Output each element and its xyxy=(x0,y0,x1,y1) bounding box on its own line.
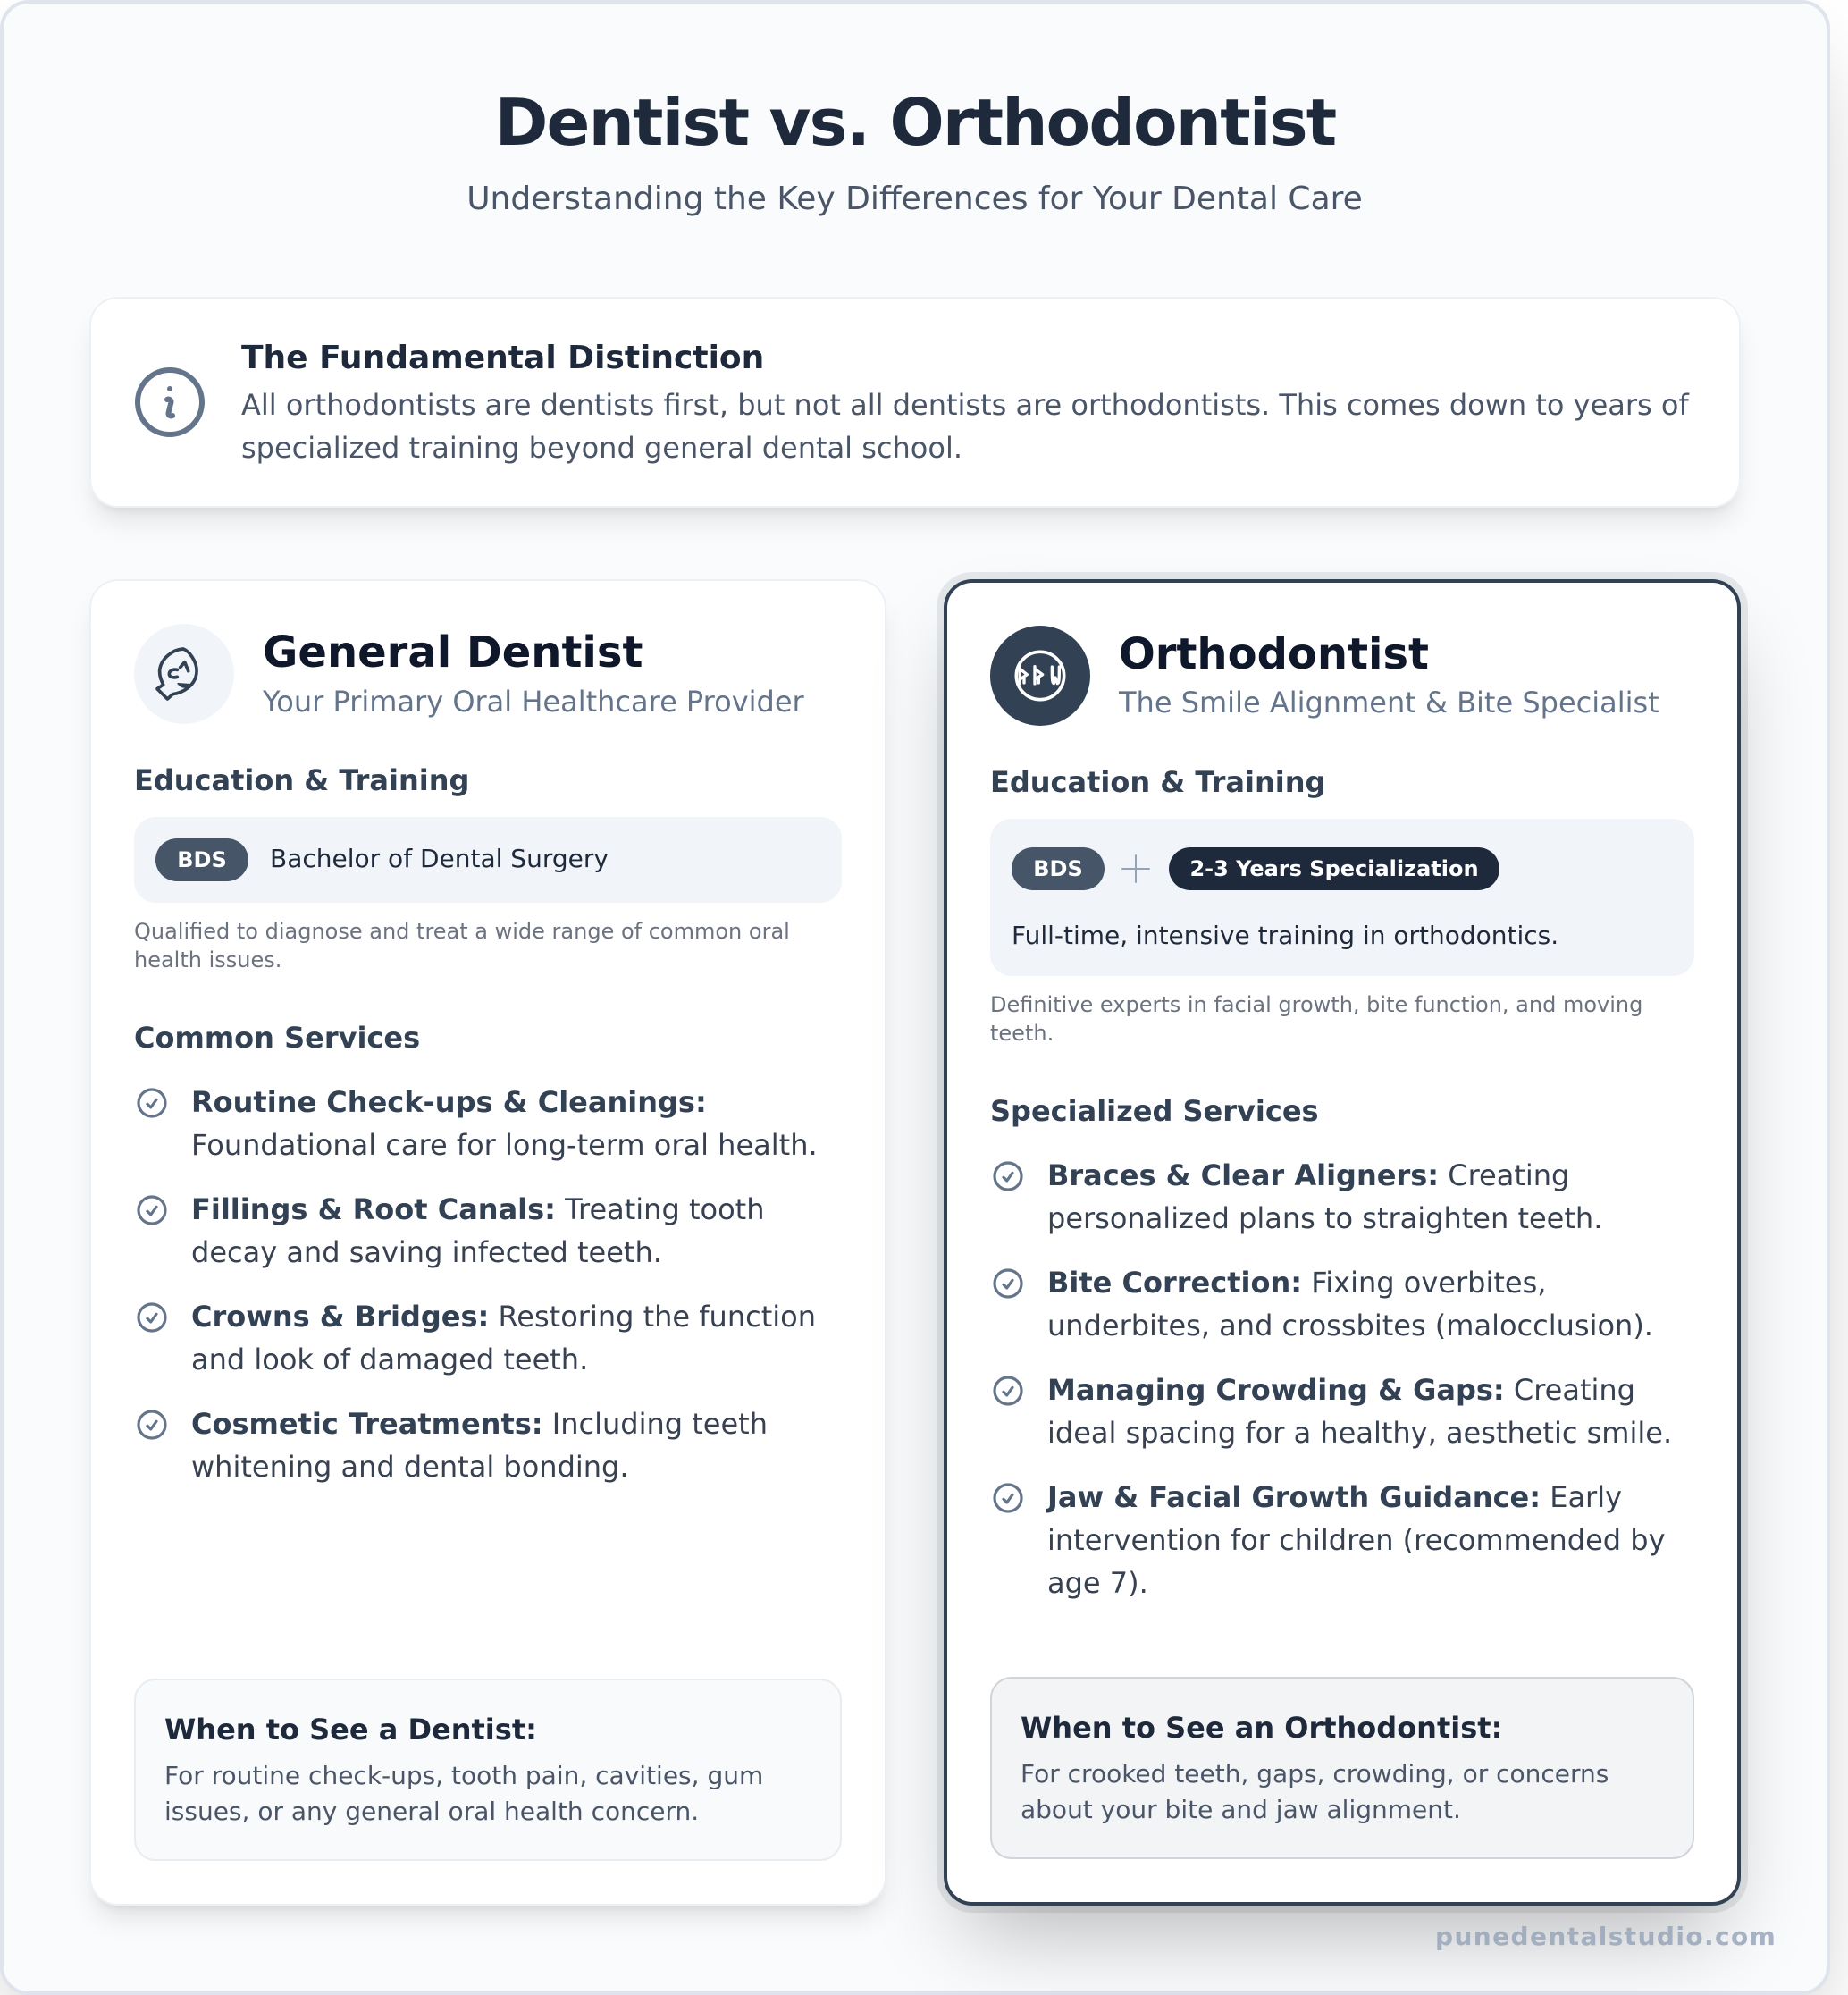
text: degree name: Bachelor of Dental Surgery xyxy=(270,844,609,873)
icon: info circle xyxy=(135,367,205,437)
heading: education and training: Education & Training xyxy=(990,765,1325,799)
service item: crowns xyxy=(137,1300,816,1376)
badge: BDS: BDS xyxy=(1033,856,1083,881)
text: callout xyxy=(1021,1759,1609,1824)
service item: bite correction: underbites, and crossbites (malocclusion). xyxy=(1047,1309,1653,1343)
text: distinction description: specialized training beyond general dental school. xyxy=(241,431,962,465)
icon: dark circle xyxy=(990,626,1090,726)
text: callout: about your bite and jaw alignment. xyxy=(1021,1795,1461,1824)
service item: jaw growth xyxy=(993,1480,1666,1600)
service item: jaw growth: intervention for children (recommended by xyxy=(1047,1523,1666,1557)
service item: braces: personalized plans to straighten teeth. xyxy=(1047,1201,1602,1235)
text: expertise note xyxy=(990,992,1642,1046)
icon: tooth glyph xyxy=(155,647,198,701)
service item: cosmetic: Cosmetic Treatments: Including teeth xyxy=(191,1407,768,1441)
service item: crowding xyxy=(993,1373,1672,1450)
panel: fundamental distinction xyxy=(89,297,1741,508)
text: training description: Full-time, intensive training in orthodontics. xyxy=(1012,921,1558,950)
heading: education and training: Education & Training xyxy=(134,763,469,797)
heading: specialized services: Specialized Services xyxy=(990,1094,1319,1128)
education box xyxy=(990,819,1694,976)
service item: check-ups: Foundational care for long-term oral health. xyxy=(191,1128,818,1162)
text: qualification note: Qualified to diagnose and treat a wide range of common oral xyxy=(134,919,790,944)
text: distinction description xyxy=(241,388,1689,465)
service item: fillings xyxy=(137,1192,764,1269)
text: qualification note xyxy=(134,919,790,972)
badge: BDS xyxy=(1012,847,1105,890)
icon: plus xyxy=(1121,854,1150,883)
text: qualification note: health issues. xyxy=(134,947,281,972)
panel: orthodontist xyxy=(944,579,1741,1906)
badge: BDS xyxy=(155,838,248,881)
text: callout: issues, or any general oral health concern. xyxy=(164,1797,699,1826)
service item: bite correction xyxy=(993,1266,1653,1343)
text: distinction description: All orthodontists are dentists first, but not all dentists are orthodontists. This comes down to years of xyxy=(241,388,1689,422)
service item: jaw growth: age 7). xyxy=(1047,1566,1148,1600)
service item: crowns: and look of damaged teeth. xyxy=(191,1343,588,1376)
heading: orthodontist: Orthodontist xyxy=(1119,629,1429,679)
badge: BDS: BDS xyxy=(177,847,227,872)
icon: aligned teeth in ring xyxy=(1015,651,1065,701)
text: callout xyxy=(164,1761,763,1826)
heading: callout: When to See a Dentist: xyxy=(164,1713,537,1747)
text: expertise note: Definitive experts in facial growth, bite function, and moving xyxy=(990,992,1642,1017)
service item: braces: Braces & Clear Aligners: Creating xyxy=(1047,1158,1569,1192)
education box xyxy=(134,817,842,903)
icon: tooth in light circle xyxy=(134,624,234,724)
text: role: The Smile Alignment & Bite Specialist xyxy=(1119,686,1659,720)
service item: braces xyxy=(993,1158,1602,1235)
service item: cosmetic xyxy=(137,1407,768,1484)
service item: check-ups: Routine Check-ups & Cleanings: xyxy=(191,1085,707,1119)
text: callout: For crooked teeth, gaps, crowding, or concerns xyxy=(1021,1759,1609,1789)
callout: when to see a dentist xyxy=(134,1679,842,1861)
service item: cosmetic: whitening and dental bonding. xyxy=(191,1450,629,1484)
service item: fillings: decay and saving infected teeth. xyxy=(191,1235,662,1269)
badge: specialization: 2-3 Years Specialization xyxy=(1189,856,1479,881)
service item: jaw growth: Jaw & Facial Growth Guidance: Early xyxy=(1047,1480,1622,1514)
watermark: punedentalstudio.com xyxy=(1435,1922,1777,1951)
heading: common services: Common Services xyxy=(134,1021,420,1055)
panel: general dentist xyxy=(89,579,886,1906)
badge: specialization xyxy=(1169,847,1499,890)
service item: check-ups xyxy=(137,1085,818,1162)
text: callout: For routine check-ups, tooth pain, cavities, gum xyxy=(164,1761,763,1790)
heading: general dentist: General Dentist xyxy=(263,627,643,678)
subtitle: Understanding the Key Differences for Your Dental Care xyxy=(466,181,1363,217)
title: Dentist vs. Orthodontist xyxy=(495,85,1335,160)
service item: crowns: Crowns & Bridges: Restoring the function xyxy=(191,1300,816,1334)
heading: the fundamental distinction: The Fundamental Distinction xyxy=(241,340,764,376)
heading: callout: When to See an Orthodontist: xyxy=(1021,1711,1502,1745)
text: role: Your Primary Oral Healthcare Provider xyxy=(263,685,804,719)
service item: crowding: ideal spacing for a healthy, aesthetic smile. xyxy=(1047,1416,1672,1450)
text: expertise note: teeth. xyxy=(990,1021,1054,1046)
callout: when to see an orthodontist xyxy=(990,1677,1694,1859)
service item: bite correction: Bite Correction: Fixing overbites, xyxy=(1047,1266,1546,1300)
service item: fillings: Fillings & Root Canals: Treating tooth xyxy=(191,1192,764,1226)
service item: crowding: Managing Crowding & Gaps: Creating xyxy=(1047,1373,1635,1407)
